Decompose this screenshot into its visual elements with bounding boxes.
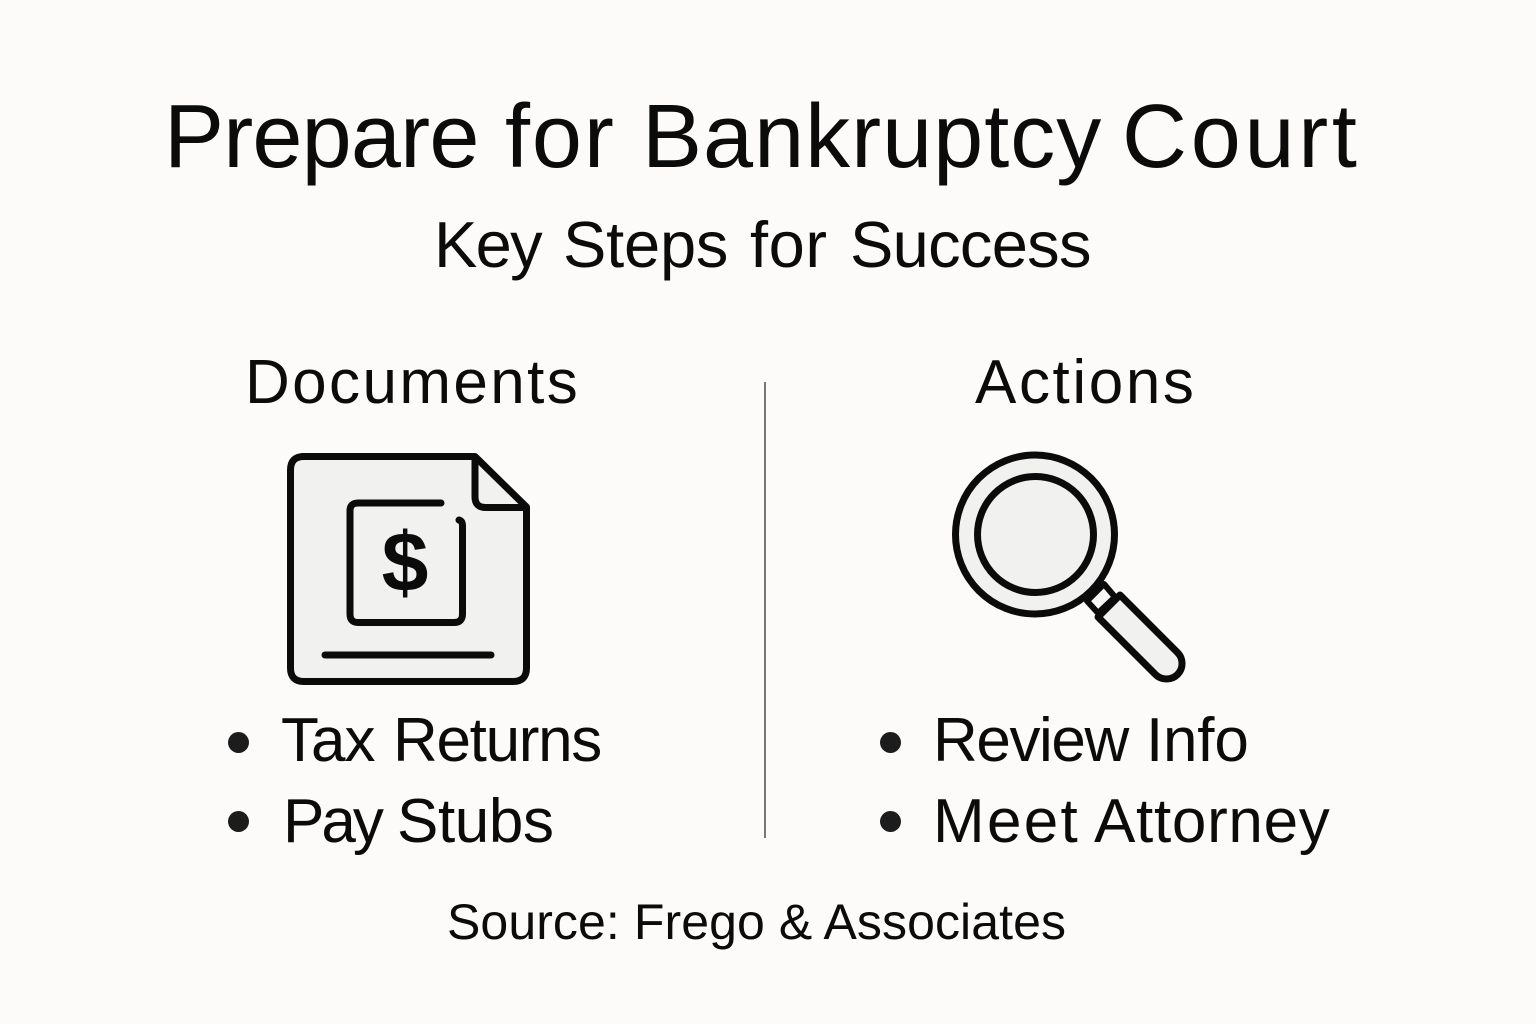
item: meet attorney: Meet (933, 787, 1080, 856)
item: meet attorney (933, 787, 1330, 856)
item: tax returns: Returns (393, 706, 601, 775)
icon: financial document with dollar sign: $ (382, 515, 428, 609)
subtitle: Success (850, 208, 1091, 281)
bullet (228, 811, 249, 832)
item: review info: Review (933, 706, 1128, 775)
subtitle (434, 208, 1091, 281)
heading: documents: Documents (245, 348, 580, 417)
heading: actions: Actions (975, 348, 1197, 417)
bullet (880, 811, 901, 832)
title: Prepare (164, 87, 479, 187)
title: Bankruptcy (642, 87, 1102, 187)
divider (764, 382, 766, 838)
list: documents (228, 706, 601, 856)
item: meet attorney: Attorney (1094, 787, 1330, 856)
subtitle: Steps (563, 208, 728, 281)
icon: magnifying glass (952, 452, 1186, 682)
bullet (228, 732, 249, 753)
title: Court (1122, 87, 1361, 187)
item: pay stubs: Pay (283, 787, 381, 856)
item: review info (933, 706, 1249, 775)
item: review info: Info (1146, 706, 1249, 775)
subtitle: Key (434, 208, 541, 281)
bullet (880, 732, 901, 753)
list: actions (880, 706, 1330, 856)
title: for (505, 87, 616, 187)
item: pay stubs: Stubs (397, 787, 554, 856)
item: pay stubs (283, 787, 554, 856)
title (164, 87, 1361, 187)
subtitle: for (750, 208, 828, 281)
icon: financial document with dollar sign (287, 453, 530, 685)
item: tax returns (281, 706, 601, 775)
source: Source: Frego & Associates (447, 894, 1066, 950)
item: tax returns: Tax (281, 706, 374, 775)
